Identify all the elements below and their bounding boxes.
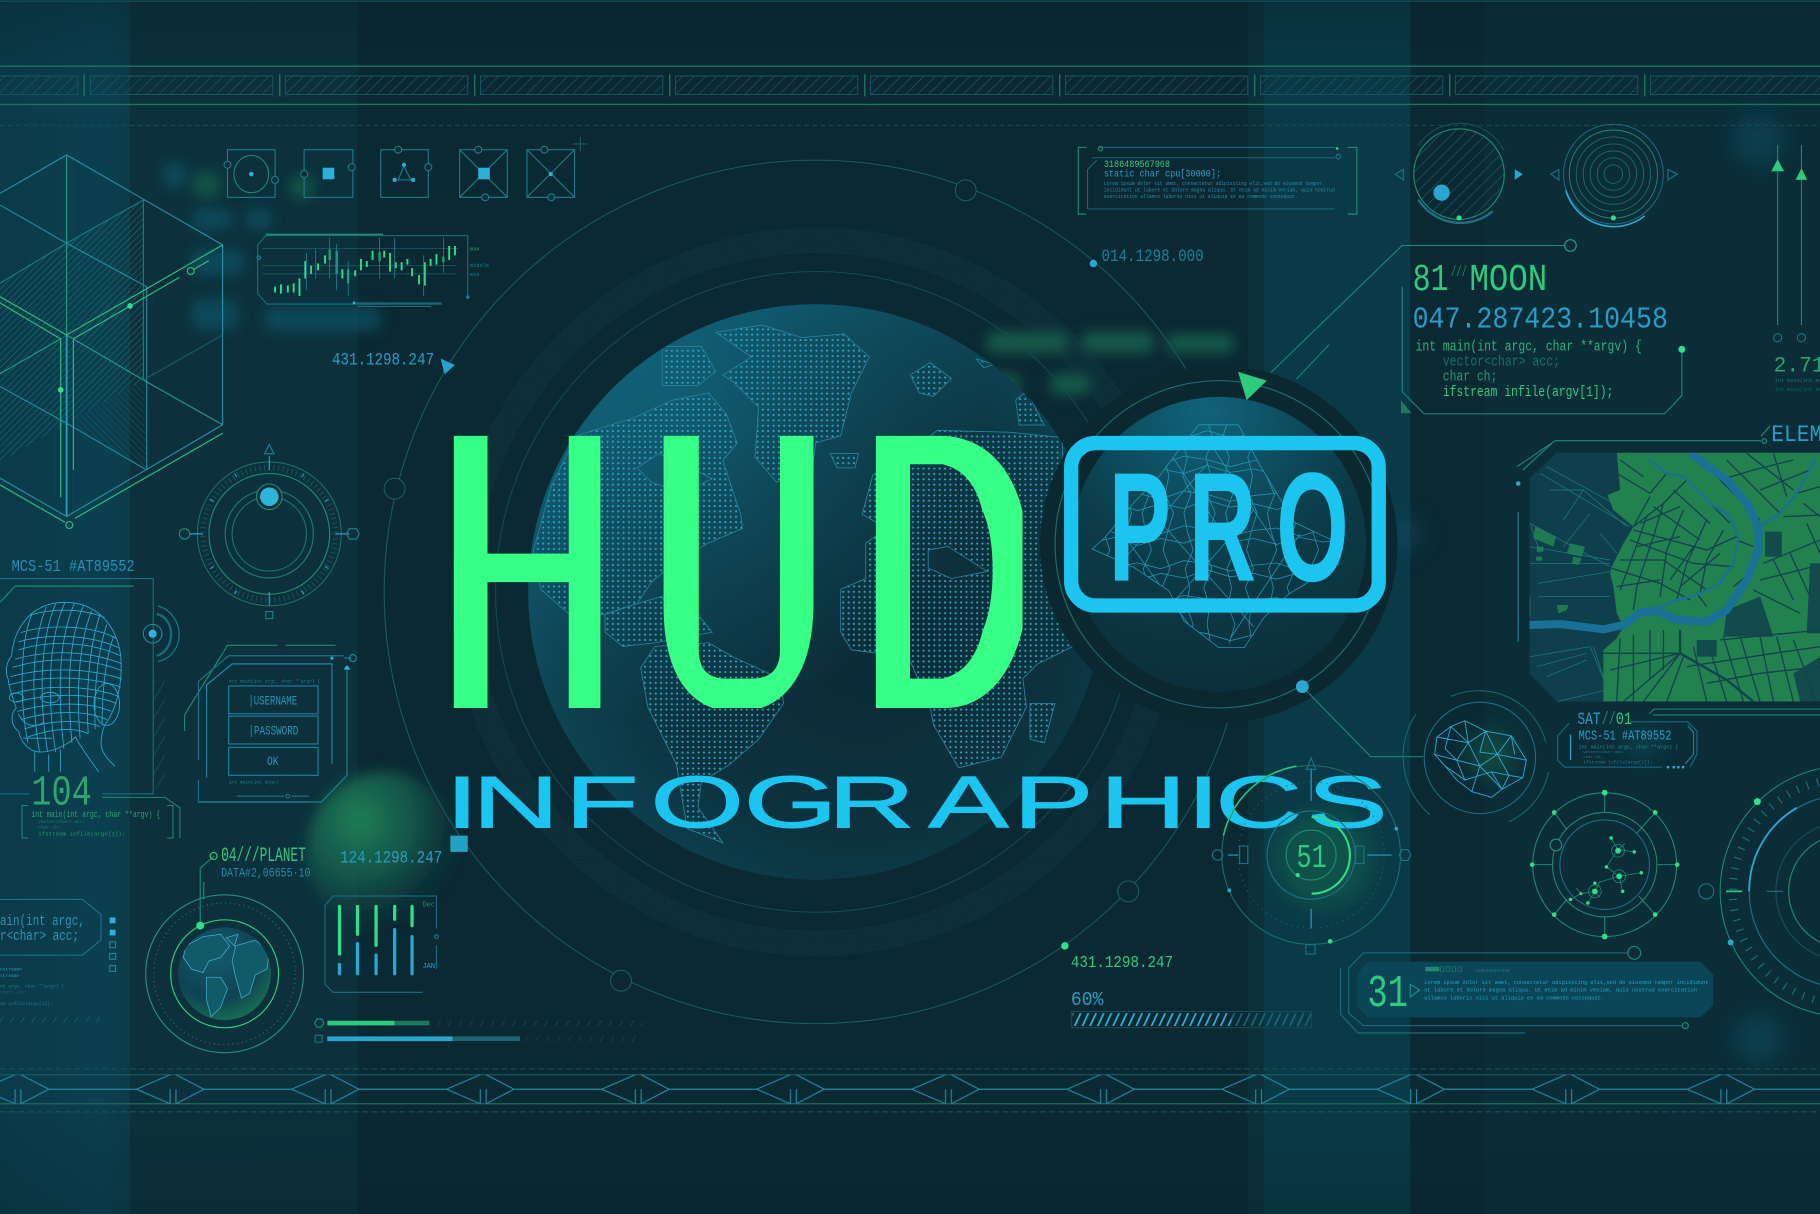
connector and asteroid widget: [1296, 680, 1548, 822]
dial control: [179, 445, 359, 619]
left code snippet: ain(int argc,: [0, 912, 85, 930]
value: 104: 104: [31, 768, 92, 817]
label: chip id: MCS-51 #AT89552: [12, 557, 135, 576]
label: SAT 01: [1577, 711, 1632, 730]
blurred background glows: [162, 114, 1784, 1062]
code terminal, top: static char cpu[30000];: [1104, 168, 1221, 180]
code brackets: ifstream infile(argv[1]);: [38, 831, 125, 838]
satellite info box: int main(int argc, char **argv) {: [1579, 744, 1678, 751]
vertical bar chart: [325, 896, 438, 992]
isometric cube: [0, 155, 223, 528]
top hatched band: [0, 1, 1820, 125]
left code snippet: char> acc;: [0, 989, 28, 995]
login panel: [185, 645, 356, 802]
green coordinate label: [1061, 942, 1173, 973]
info panel 31: [1341, 946, 1713, 1033]
radar circle, concentric: [1551, 124, 1677, 227]
parcels on the dark side: [1530, 467, 1630, 702]
green blocks: [1533, 527, 1585, 613]
icon: square target: [301, 150, 355, 197]
coordinate label: 124.1298.247: [340, 849, 442, 868]
vertical bar chart: Dec: [423, 901, 435, 909]
green arrow marker on sphere: [1238, 372, 1267, 400]
code brackets: [22, 797, 180, 838]
left code snippet: r<char> acc;: [0, 927, 79, 945]
code lines: [1415, 340, 1642, 401]
label: SAT 01: SAT: [1577, 711, 1601, 730]
bottom chevron band: [0, 1069, 1820, 1112]
candlestick chart: middle: [470, 263, 489, 269]
satellite info box: char ch;: [1583, 755, 1603, 760]
code brackets: int main(int argc, char **argv) {: [31, 809, 160, 820]
info panel 31: Lorem ipsum dolor sit amet, consectetur adipisicing elit,sed do eiusmod tempor incididunt: [1424, 979, 1709, 986]
heading: 81 MOON: ///: [1451, 263, 1467, 281]
city map panel: [1516, 422, 1820, 702]
planet widget: [146, 845, 310, 1053]
60 percent progress meter: [1071, 989, 1312, 1028]
info panel 31: ut labore et dolore magna aliqua. Ut enim ad minim veniam, quis nostrud exercitation: [1424, 987, 1697, 994]
field labels: [229, 693, 298, 785]
left code snippet: [0, 899, 115, 1022]
heading: 81 MOON: 81: [1413, 258, 1449, 302]
dark quarters: [1697, 532, 1820, 702]
pro badge: [1071, 441, 1379, 615]
head wireframe: [6, 602, 122, 772]
code terminal, top: exercitation ullamco laboris nisi ut aliquip ex ea commodo consequat.: [1104, 194, 1298, 200]
value: coordinates: 047.287423.10458: [1413, 303, 1668, 337]
field labels: |USERNAME: [248, 693, 297, 708]
icon: crossed square with block: [460, 146, 507, 201]
blue node on sphere: [1296, 680, 1309, 693]
planet data: DATA#2,06655·10: [221, 865, 310, 880]
map artwork: [1529, 453, 1820, 702]
title: HUD: HUD: [437, 351, 1039, 793]
earth outlines: [183, 934, 269, 1017]
accent square: [450, 836, 468, 852]
asteroid mesh: [1435, 721, 1526, 797]
left code snippet: am infile(argv[1]);: [0, 1001, 53, 1007]
left code snippet: stream>: [0, 973, 20, 979]
moon data panel: [1271, 240, 1685, 414]
code lines: char ch;: [1443, 370, 1497, 386]
field labels: OK: [267, 754, 279, 769]
icon: circle target: [224, 150, 279, 197]
satellite info box: ifstream infile(argv[1]);: [1583, 760, 1653, 766]
gauge 51: [1212, 758, 1411, 954]
level indicators, top right: [1771, 145, 1820, 393]
heading: 81 MOON: [1413, 258, 1547, 302]
field labels: |PASSWORD: [248, 724, 298, 739]
street grid: [1603, 453, 1820, 702]
vertical bar chart: JAN: [423, 963, 435, 971]
node cluster radar: [1530, 790, 1680, 940]
info panel 31: ullamco laboris nisi ut aliquip ex ea commodo consequat.: [1424, 994, 1604, 1001]
label: SAT 01: //: [1602, 711, 1616, 730]
scanner ring: [143, 606, 179, 662]
subtitle: INFOGRAPHICS: INFOGRAPHICS: [445, 762, 1388, 844]
coordinate label with dot: 014.1298.000: [1102, 248, 1204, 267]
candlestick chart: max: [470, 247, 479, 253]
central globe with dotted world map: [384, 160, 1248, 1024]
code lines: vector<char> acc;: [1443, 355, 1560, 371]
candlestick chart: [257, 234, 489, 306]
code terminal, top: 3186489567968: [1104, 159, 1170, 170]
satellite info box: [1558, 709, 1820, 767]
code lines: ifstream infile(argv[1]);: [1443, 385, 1613, 401]
candlestick chart: min: [470, 272, 479, 278]
code brackets: vector<char> acc;: [38, 819, 85, 825]
code lines: int main(int argc, char **argv) {: [1415, 340, 1642, 356]
field labels: int main(int argc): [229, 779, 279, 785]
river: [1529, 453, 1758, 629]
value: 31: 31: [1367, 968, 1408, 1020]
login panel: int main(int argc, char **argv) {: [229, 678, 320, 684]
value: 51: 51: [1297, 840, 1327, 878]
planet label: 04///PLANET: [221, 845, 306, 868]
code brackets: char ch;: [38, 825, 61, 831]
face scan panel: [0, 557, 180, 838]
label: SAT 01: 01: [1616, 711, 1632, 730]
code terminal, top: incididunt ut labore et dolore magna aliqua. Ut enim ad minim veniam, quis nostrud: [1104, 188, 1335, 194]
code terminal, top: Lorem ipsum dolor sit amet, consectetur adipisicing elit,sed do eiusmod tempor: [1104, 181, 1322, 187]
icon: crossed square with dot: [527, 137, 587, 201]
icon: triangle nodes: [381, 146, 432, 197]
partial dial, right edge: [1699, 766, 1820, 1017]
60 percent progress meter: 60%: [1071, 989, 1104, 1011]
radar circle, hatched: [1395, 123, 1523, 223]
info panel 31: 3186489567968: [1475, 968, 1510, 974]
code terminal, top: [1078, 146, 1357, 214]
progress bars: [315, 1019, 643, 1042]
green coordinate label: 431.1298.247: [1071, 954, 1173, 973]
satellite info box: vector<char> acc;: [1583, 750, 1625, 755]
pro sphere with wireframe mesh: [1040, 366, 1398, 723]
left code snippet: ostream>: [0, 966, 22, 972]
coordinate label with pointer: 431.1298.247: [332, 350, 434, 370]
molecule nodes: [1569, 836, 1643, 905]
wireframe mesh: [1091, 420, 1346, 650]
left code snippet: nt argc, char **argv) {: [0, 984, 64, 990]
text: PRO: PRO: [1109, 441, 1349, 615]
row of square icons: [224, 137, 587, 201]
dotted continents: [534, 325, 1080, 843]
heading: 81 MOON: MOON: [1469, 258, 1547, 302]
label: chip id small: MCS-51 #AT89552: [1579, 728, 1671, 744]
